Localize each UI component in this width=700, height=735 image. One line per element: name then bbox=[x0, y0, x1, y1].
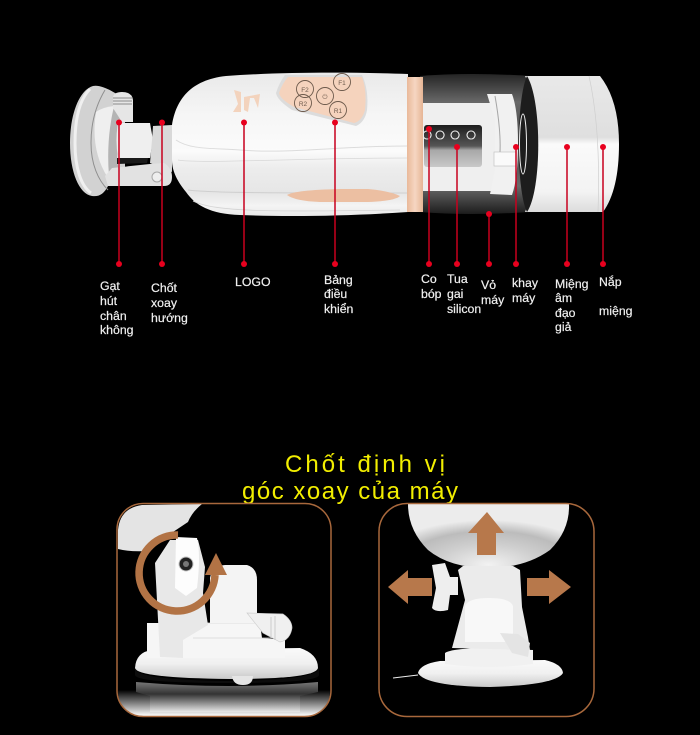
base reflection bbox=[136, 682, 318, 712]
callout line: Vỏ máy bbox=[486, 211, 492, 267]
label: Nắp miệng bbox=[599, 274, 633, 318]
callout line: Nắp miệng bbox=[600, 144, 606, 267]
label: Chốt xoay hướng: Chốt bbox=[151, 281, 178, 295]
control panel: F2 bbox=[301, 87, 309, 94]
panel: rotation bbox=[117, 504, 331, 716]
label: Tua gai silicon: silicon bbox=[447, 302, 481, 316]
callout line: Bảng điều khiển bbox=[332, 120, 338, 267]
callout line: Gạt hút chân không bbox=[116, 120, 122, 267]
label: Chốt xoay hướng: xoay bbox=[151, 296, 178, 310]
panel frame bbox=[117, 504, 331, 716]
control panel bbox=[276, 74, 367, 126]
label: Chốt xoay hướng: hướng bbox=[151, 311, 188, 325]
icon: main body bbox=[172, 73, 408, 216]
label: Gạt hút chân không: Gạt bbox=[100, 279, 120, 293]
label: Tua gai silicon: gai bbox=[447, 287, 463, 301]
label: Gạt hút chân không bbox=[100, 279, 134, 337]
icon: suction cup base bbox=[70, 86, 133, 196]
icon: right arrow bbox=[527, 570, 571, 604]
label: Tua gai silicon bbox=[447, 272, 481, 316]
icon: inner tray bbox=[423, 94, 518, 195]
callout line: Co bóp bbox=[426, 126, 432, 267]
label: Bảng điều khiển: khiển bbox=[324, 302, 354, 316]
label: Vỏ máy: máy bbox=[481, 293, 505, 307]
label: Gạt hút chân không: chân bbox=[100, 309, 127, 323]
label: Miệng âm đạo giả: đạo bbox=[555, 306, 576, 320]
leader lines bbox=[116, 120, 606, 267]
label: Chốt xoay hướng bbox=[151, 281, 188, 325]
panel: direction bbox=[379, 504, 594, 716]
callout line: Chốt xoay hướng bbox=[159, 120, 165, 267]
title: Chốt định vị bbox=[285, 451, 445, 478]
label: Miệng âm đạo giả: Miệng bbox=[555, 277, 589, 291]
label: Nắp miệng: Nắp bbox=[599, 274, 622, 289]
white fade floor bbox=[118, 690, 330, 716]
device body corner bbox=[118, 504, 202, 551]
side grip pad bbox=[287, 189, 400, 202]
title: góc xoay của máy bbox=[242, 478, 458, 505]
icon: mouth cover bbox=[519, 76, 619, 212]
icon: left arrow bbox=[388, 570, 432, 604]
label: Bảng điều khiển: điều bbox=[324, 287, 347, 301]
callout line: LOGO bbox=[241, 120, 247, 267]
logo bbox=[233, 90, 260, 112]
label: Tua gai silicon: Tua bbox=[447, 272, 468, 286]
label: Miệng âm đạo giả: giả bbox=[555, 320, 572, 334]
button strip: copper band bbox=[407, 77, 423, 212]
icon: swivel pin bbox=[105, 123, 172, 186]
control panel: ⏻ bbox=[322, 94, 328, 101]
label: Co bóp: bóp bbox=[421, 287, 442, 301]
label: Vỏ máy bbox=[481, 278, 505, 307]
label: Nắp miệng: miệng bbox=[599, 304, 633, 318]
panel frame bbox=[379, 504, 594, 716]
icon: dark housing bbox=[420, 74, 530, 214]
mount base bbox=[135, 537, 319, 712]
label: Bảng điều khiển: Bảng bbox=[324, 273, 353, 287]
callout line: khay máy bbox=[513, 144, 519, 267]
mount bbox=[393, 563, 563, 687]
callout line: Tua gai silicon bbox=[454, 144, 460, 267]
label: Bảng điều khiển bbox=[324, 273, 354, 316]
label: Gạt hút chân không: không bbox=[100, 323, 134, 337]
control panel: F1 bbox=[338, 80, 346, 87]
label: LOGO: LOGO bbox=[235, 275, 271, 289]
label: Miệng âm đạo giả: âm bbox=[555, 291, 572, 305]
title bbox=[242, 451, 458, 505]
label: Vỏ máy: Vỏ bbox=[481, 278, 496, 292]
control panel: R1 bbox=[334, 108, 343, 115]
control panel: R2 bbox=[299, 101, 308, 108]
icon: device bowl bbox=[408, 504, 569, 568]
icon: rotation arrow bbox=[139, 535, 227, 611]
product diagram: device bbox=[70, 73, 619, 216]
icon: up arrow bbox=[468, 512, 504, 555]
label: khay máy bbox=[512, 276, 539, 305]
label: khay máy: khay bbox=[512, 276, 539, 290]
label: Gạt hút chân không: hút bbox=[100, 294, 118, 308]
label: Co bóp bbox=[421, 272, 442, 301]
label: Co bóp: Co bbox=[421, 272, 437, 286]
label: Miệng âm đạo giả bbox=[555, 277, 589, 334]
label: khay máy: máy bbox=[512, 291, 536, 305]
callout line: Miệng âm đạo giả bbox=[564, 144, 570, 267]
